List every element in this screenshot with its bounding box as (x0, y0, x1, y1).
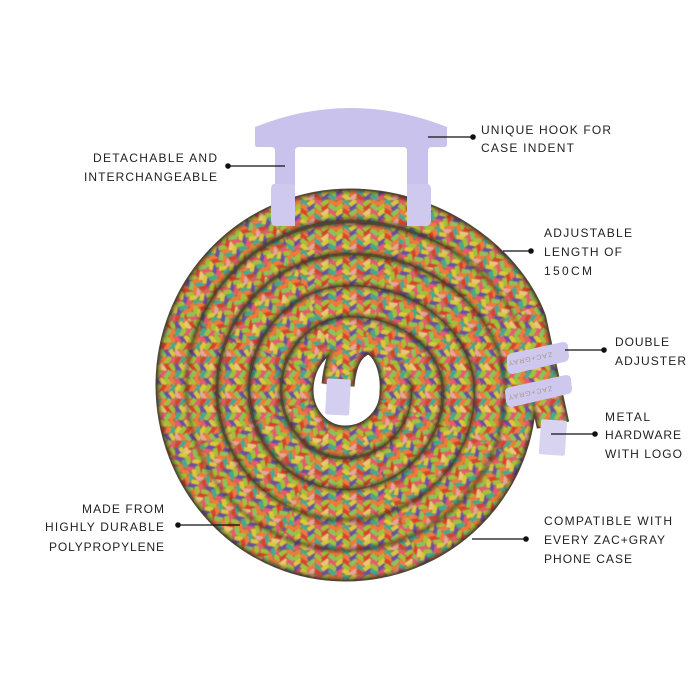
label: polypropylene: POLYPROPYLENE (49, 540, 164, 554)
label: double adjuster: DOUBLE (615, 335, 669, 349)
label: detachable: INTERCHANGEABLE (84, 170, 217, 184)
label: adjustable length: ADJUSTABLE (544, 226, 632, 240)
label: unique hook: UNIQUE HOOK FOR (481, 123, 611, 137)
lilac hook (255, 108, 447, 226)
leader: polypropylene (176, 523, 240, 527)
leader: adjustable (503, 249, 533, 253)
leader lines and dots (176, 135, 606, 541)
label: detachable: DETACHABLE AND (93, 151, 217, 165)
label: adjustable length: 150CM (544, 264, 592, 278)
label: unique hook: CASE INDENT (481, 141, 575, 155)
label: metal hardware: WITH LOGO (605, 447, 682, 461)
label: metal hardware: HARDWARE (605, 428, 681, 442)
label: detachable (84, 151, 217, 184)
coiled braided rope (156, 188, 570, 582)
label: adjustable length: LENGTH OF (544, 245, 622, 259)
leader: double adjuster (565, 348, 606, 352)
leader: compatible (472, 537, 528, 541)
label: compatible (544, 514, 672, 566)
label: polypropylene (45, 502, 164, 554)
leader: detachable (226, 164, 285, 168)
adjuster band 1: ZAC+GRAY (507, 350, 553, 366)
adjuster band 2: ZAC+GRAY (507, 384, 553, 400)
label: metal hardware (605, 410, 682, 461)
label: compatible: EVERY ZAC+GRAY (544, 533, 665, 547)
leader: hook (428, 135, 475, 139)
label: double adjuster (615, 335, 686, 368)
label: double adjuster: ADJUSTER (615, 354, 686, 368)
label: polypropylene: MADE FROM (82, 502, 164, 516)
label: polypropylene: HIGHLY DURABLE (45, 520, 164, 534)
metal end cap inner (325, 378, 351, 416)
leader: metal hardware (551, 432, 597, 436)
hook left clip (271, 184, 295, 226)
label: adjustable length (544, 226, 632, 278)
double adjuster bands (505, 342, 572, 407)
label: compatible: PHONE CASE (544, 552, 632, 566)
hook right clip (407, 184, 431, 226)
label: metal hardware: METAL (605, 410, 650, 424)
metal end cap outer (539, 419, 567, 456)
label: unique hook (481, 123, 611, 155)
label: compatible: COMPATIBLE WITH (544, 514, 672, 528)
